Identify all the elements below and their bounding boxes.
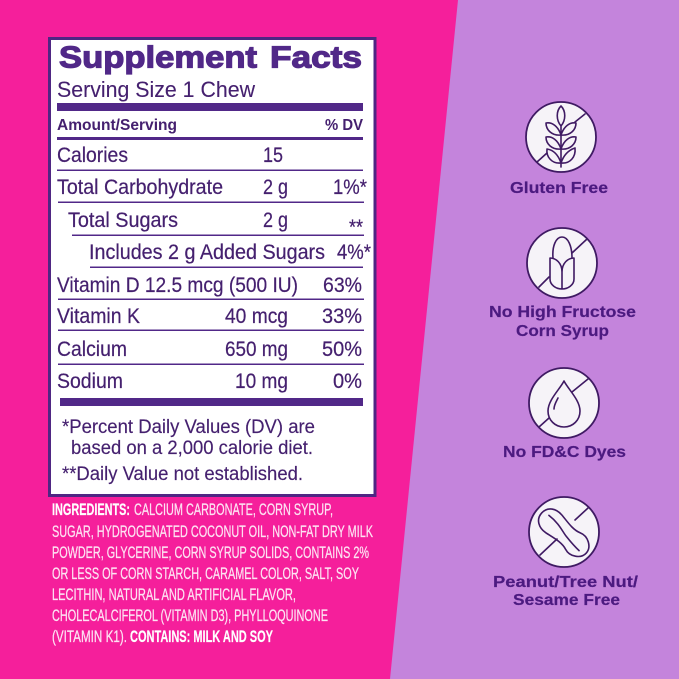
row: vitamin D: 63% xyxy=(323,274,362,297)
label: no high fructose corn syrup xyxy=(489,304,636,340)
ingredients text block: CONTAINS: MILK AND SOY xyxy=(130,628,273,646)
label: gluten free: Gluten Free xyxy=(510,180,608,197)
bottom thick bar xyxy=(60,398,363,406)
column header: amount per serving: Amount/Serving xyxy=(57,117,177,134)
row: vitamin K xyxy=(57,305,362,328)
row: total carbohydrate: Total Carbohydrate xyxy=(57,176,223,199)
ingredients text block xyxy=(52,501,373,646)
ingredients text block: CHOLECALCIFEROL (VITAMIN D3), PHYLLOQUINONE xyxy=(52,607,328,625)
ingredients text block: POWDER, GLYCERINE, CORN SYRUP SOLIDS, CONTAINS 2% xyxy=(52,544,369,562)
row: total sugars: 2 g xyxy=(263,209,288,232)
row: calories: Calories xyxy=(57,144,128,167)
row: calcium: 650 mg xyxy=(225,338,288,361)
top thick bar xyxy=(57,103,363,111)
row: total carbohydrate: 1%* xyxy=(333,176,367,199)
row: added sugars: 4%* xyxy=(337,241,371,264)
icon: no high fructose corn xyxy=(527,228,597,298)
row: total sugars: ** xyxy=(349,216,363,239)
panel: supplement facts xyxy=(50,38,375,496)
serving size: Serving Size 1 Chew xyxy=(57,77,256,102)
row: calories: 15 xyxy=(263,144,283,167)
row: sodium: Sodium xyxy=(57,370,123,393)
title: Facts xyxy=(270,40,362,74)
row: calcium: Calcium xyxy=(57,338,127,361)
row: vitamin K: Vitamin K xyxy=(57,305,140,328)
row: total sugars xyxy=(68,209,363,239)
row: calcium xyxy=(57,338,362,361)
title: Supplement xyxy=(59,40,257,74)
row: total carbohydrate xyxy=(57,176,367,199)
ingredients text block: LECITHIN, NATURAL AND ARTIFICIAL FLAVOR, xyxy=(52,586,296,604)
icon: gluten free wheat xyxy=(526,102,596,172)
footnotes: *Percent Daily Values (DV) are xyxy=(62,417,315,438)
footnotes xyxy=(62,417,315,485)
row: vitamin K: 40 mcg xyxy=(225,305,288,328)
label: no high fructose corn syrup: No High Fructose xyxy=(489,304,636,321)
row: sodium xyxy=(57,370,362,393)
background: slanted purple panel xyxy=(390,0,679,679)
icon: no dyes drop xyxy=(529,368,599,438)
label: peanut tree nut sesame free: Sesame Free xyxy=(513,592,620,609)
column header: percent daily value: % DV xyxy=(325,117,363,134)
row: total carbohydrate: 2 g xyxy=(263,176,288,199)
title xyxy=(59,40,362,74)
row: total sugars: Total Sugars xyxy=(68,209,178,232)
header rule xyxy=(57,137,363,140)
label: no high fructose corn syrup: Corn Syrup xyxy=(516,323,609,340)
row: sodium: 10 mg xyxy=(235,370,288,393)
label: peanut tree nut sesame free: Peanut/Tree Nut/ xyxy=(493,574,639,591)
footnotes: based on a 2,000 calorie diet. xyxy=(71,438,313,459)
label: no FD&C dyes: No FD&C Dyes xyxy=(503,444,626,461)
row: calories xyxy=(57,144,283,167)
row: calcium: 50% xyxy=(322,338,362,361)
ingredients text block: INGREDIENTS: xyxy=(52,501,130,519)
ingredients text block: CALCIUM CARBONATE, CORN SYRUP, xyxy=(134,501,333,519)
icon: no peanut xyxy=(529,497,599,567)
row: added sugars: Includes 2 g Added Sugars xyxy=(89,241,325,264)
ingredients text block: OR LESS OF CORN STARCH, CARAMEL COLOR, SALT, SOY xyxy=(52,565,359,583)
label: peanut tree nut sesame free xyxy=(493,574,639,609)
row: vitamin K: 33% xyxy=(322,305,362,328)
row: vitamin D: Vitamin D 12.5 mcg (500 IU) xyxy=(57,274,298,297)
ingredients text block: SUGAR, HYDROGENATED COCONUT OIL, NON-FAT DRY MILK xyxy=(52,523,373,541)
footnotes: **Daily Value not established. xyxy=(62,464,303,485)
ingredients text block: (VITAMIN K1). xyxy=(52,628,127,646)
row: sodium: 0% xyxy=(333,370,362,393)
